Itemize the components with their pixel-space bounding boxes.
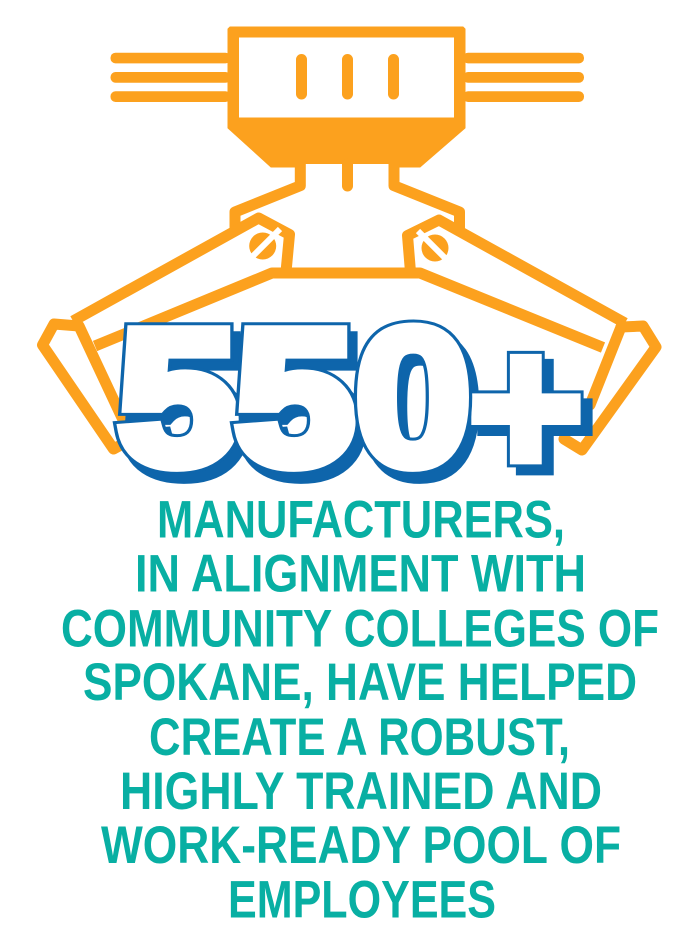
right side rods [463, 53, 584, 102]
number drop shadow: 0 [361, 296, 479, 516]
claw head housing [228, 27, 465, 169]
number drop shadow: 5 [126, 300, 244, 513]
caption text [61, 491, 659, 930]
big number: 550+ [119, 287, 593, 525]
right screw [418, 231, 452, 265]
caption text: CREATE A ROBUST, [149, 708, 570, 767]
caption text: HIGHLY TRAINED AND [120, 762, 602, 821]
caption text: EMPLOYEES [228, 871, 496, 930]
number drop shadow: 5 [243, 300, 361, 513]
digit 0: 0 [354, 287, 472, 507]
left screw [246, 229, 280, 263]
neck [235, 164, 460, 232]
plus sign: + [468, 296, 584, 517]
first digit 5: 5 [119, 291, 237, 504]
first digit 5: 5 [119, 291, 237, 504]
left finger [42, 324, 132, 449]
second digit 5: 5 [236, 291, 354, 504]
left side rods [110, 53, 230, 102]
number drop shadow: + [477, 304, 593, 525]
icon: robotic claw [42, 27, 656, 450]
left arm [73, 218, 603, 348]
plus sign: + [468, 296, 584, 517]
caption text: MANUFACTURERS, [157, 491, 565, 550]
second digit 5: 5 [236, 291, 354, 504]
digit 0: 0 [354, 287, 472, 507]
right arm [408, 220, 625, 323]
number drop shadow [126, 296, 593, 525]
right finger [564, 326, 656, 450]
caption text: IN ALIGNMENT WITH [135, 545, 586, 604]
